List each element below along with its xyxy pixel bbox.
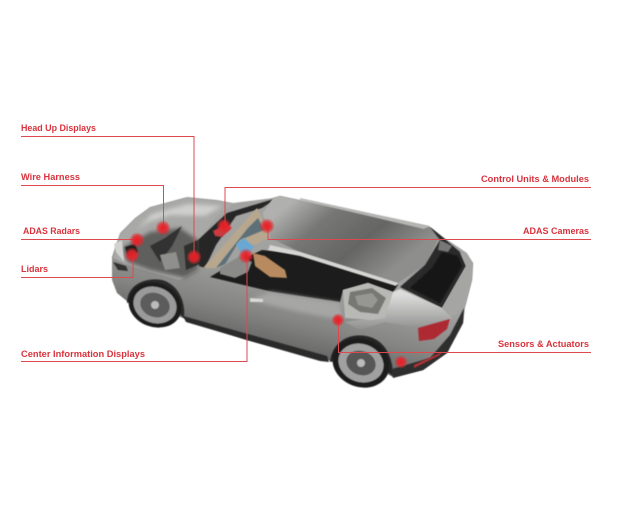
front grille [113,262,128,271]
component markers [124,218,408,368]
label: ADAS Radars: ADAS Radars [23,226,80,236]
door handle [250,298,263,302]
label: Sensors & Actuators: Sensors & Actuators [498,339,589,349]
windshield frame [203,208,270,268]
roof rail highlight [268,245,398,286]
taillight [418,319,450,341]
car illustration [112,196,473,378]
car silhouette body [112,196,473,377]
front wheel arch [127,279,184,318]
hood transparent area [113,198,233,280]
side windows [210,250,398,302]
rear reflector [414,352,442,368]
label: Lidars: Lidars [21,264,48,274]
label: Head Up Displays: Head Up Displays [21,123,96,133]
label: Center Information Displays: Center Information Displays [21,349,145,359]
side sill dark [183,316,329,362]
door highlight [250,292,343,320]
rear window [400,227,466,308]
seat and arm tint [253,253,287,278]
label: Control Units & Modules: Control Units & Modules [481,174,589,184]
label: ADAS Cameras: ADAS Cameras [523,226,589,236]
roof [263,196,440,283]
label: Wire Harness: Wire Harness [21,172,80,182]
rear wheel arch [330,335,393,376]
tailgate glass [410,252,462,303]
rear wheel [326,331,396,395]
interior under display [220,256,252,278]
tailgate top highlight [438,240,452,252]
front wheel [122,275,188,335]
engine bay [122,228,198,278]
red console highlight [213,224,232,237]
engine detail [114,226,200,270]
hood highlight [136,204,222,230]
rear pillar [442,252,473,318]
rear bumper dark [392,308,464,378]
connector lines [21,136,591,362]
windshield glass [216,218,264,268]
A pillar and dark cowl [198,198,277,268]
rear quarter highlight [345,289,452,330]
rear mechanical parts [343,283,393,320]
roof edge highlight [300,198,430,229]
central display [236,238,254,254]
